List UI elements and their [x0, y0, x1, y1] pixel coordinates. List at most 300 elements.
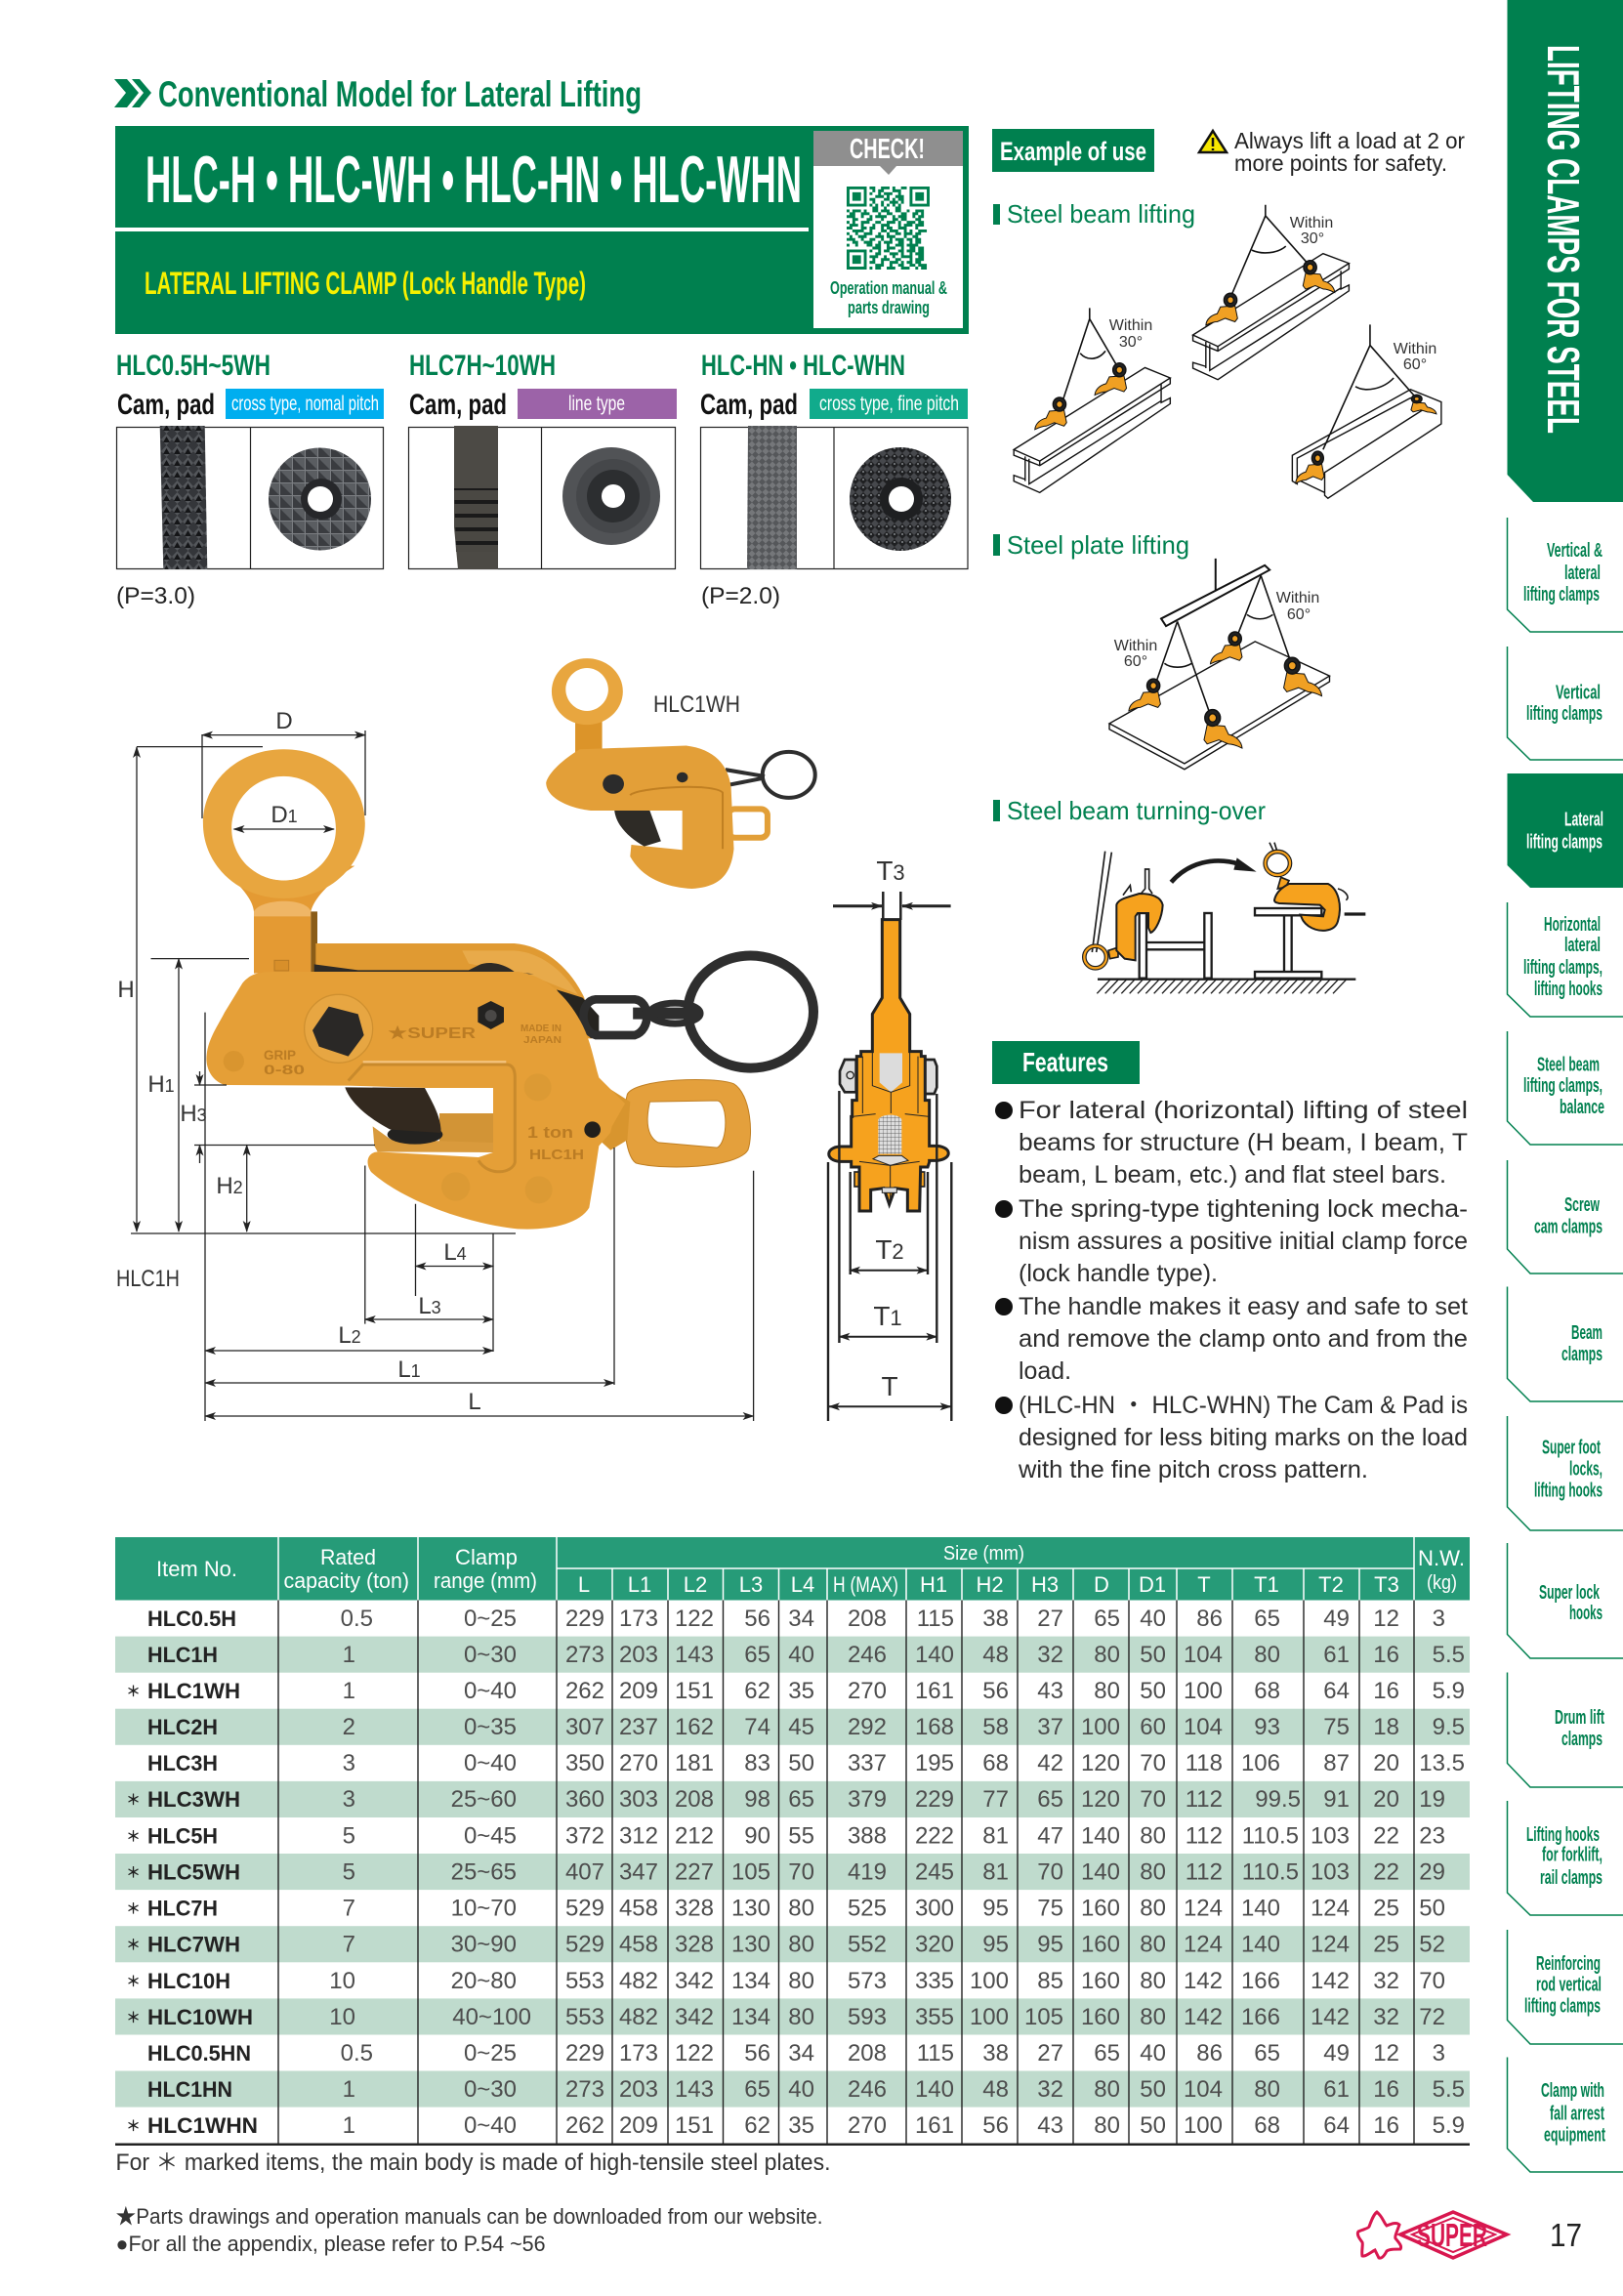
row: HLC3WH: 112: [1186, 1786, 1223, 1813]
row: HLC2H: 58: [982, 1714, 1009, 1740]
row: HLC1WH: 64: [1323, 1678, 1350, 1704]
table header: H2: [976, 1572, 1004, 1597]
row: HLC0.5H: 40: [1140, 1606, 1166, 1632]
row: HLC1WH: 62: [744, 1678, 770, 1704]
row: HLC1WHN: 16: [1373, 2112, 1399, 2139]
row: HLC7H: 25: [1373, 1895, 1399, 1922]
row: HLC1HN: 0~30: [464, 2076, 517, 2103]
row: HLC0.5H: 86: [1196, 1606, 1223, 1632]
row: HLC1H: 80: [1094, 1642, 1120, 1668]
table stripes: [115, 1637, 1470, 2108]
row: HLC1WHN: 5.9: [1433, 2112, 1465, 2139]
row: HLC5WH: 245: [915, 1859, 954, 1885]
row: HLC3WH: 25~60: [451, 1786, 517, 1813]
row: HLC1HN: 16: [1373, 2076, 1399, 2103]
row: HLC0.5H: 12: [1373, 1606, 1399, 1632]
QR code: [847, 187, 930, 270]
row: HLC5H: 140: [1081, 1822, 1120, 1850]
row: HLC1HN: 40: [788, 2076, 814, 2103]
row: HLC5WH: 80: [1140, 1859, 1166, 1885]
dimension labels: L3: [418, 1293, 441, 1319]
row: HLC10WH: ＊: [126, 2010, 141, 2026]
row: HLC10WH: 355: [915, 2004, 954, 2030]
row: HLC2H: 168: [915, 1714, 954, 1740]
within angle labels: beam lifting: 30°: [1301, 230, 1324, 247]
features list: [995, 1097, 1468, 1483]
row: HLC3WH: 70: [1140, 1786, 1166, 1813]
tab: vertical and lateral lifting clamps: [1508, 518, 1623, 632]
row: HLC7H: 130: [731, 1895, 770, 1922]
tab: clamp with fall arrest equipment: [1508, 2057, 1623, 2172]
row: HLC1HN: 5.5: [1433, 2076, 1465, 2103]
row: HLC1WHN: ＊: [126, 2118, 141, 2135]
row: HLC0.5HN: 56: [744, 2040, 770, 2066]
row: HLC7H: 7: [343, 1895, 355, 1922]
row: HLC7H: 529: [565, 1895, 604, 1922]
cam and pad variant: line type: line type: [568, 393, 625, 415]
tab: horizontal lateral lifting clamps, lifting hooks: [1508, 902, 1623, 1017]
table bottom rule: [115, 2143, 1470, 2146]
row: HLC1WH: 270: [848, 1678, 887, 1704]
row: HLC10H: 335: [915, 1968, 954, 1994]
row: HLC0.5HN: 65: [1254, 2040, 1280, 2066]
table header: H3: [1031, 1572, 1059, 1597]
row: HLC1WHN: 100: [1184, 2112, 1223, 2139]
table grid: [278, 1600, 1414, 2144]
table header: L: [578, 1572, 590, 1597]
row: HLC3H: 87: [1323, 1750, 1350, 1776]
row: HLC0.5H: 229: [565, 1606, 604, 1632]
row: HLC0.5HN: 3: [1433, 2040, 1445, 2066]
row: HLC2H: 104: [1184, 1714, 1223, 1740]
tab: lifting hooks for forklift, rail clamps: [1508, 1801, 1623, 1915]
row: HLC1HN: 50: [1140, 2076, 1166, 2103]
row: HLC1H: 0~30: [464, 1642, 517, 1668]
row: HLC3WH: 3: [343, 1786, 355, 1813]
row: HLC3WH: 20: [1373, 1786, 1399, 1813]
table header: Clamp: [455, 1545, 518, 1569]
row: HLC10H: [126, 1968, 1445, 1994]
row: HLC1H: 32: [1037, 1642, 1063, 1668]
row: HLC0.5H: 27: [1037, 1606, 1063, 1632]
tab: beam clamps: [1508, 1287, 1623, 1401]
row: HLC5H: 0~45: [464, 1822, 517, 1850]
row: HLC7H: 95: [982, 1895, 1009, 1922]
row: HLC10WH: 553: [565, 2004, 604, 2030]
row: HLC10WH: 482: [619, 2004, 658, 2030]
diagram: steel beam lifting: [1014, 205, 1441, 498]
row: HLC3WH: ＊: [126, 1792, 141, 1809]
row: HLC5WH: 419: [848, 1859, 887, 1885]
tab: screw cam clamps: Screw: [1564, 1194, 1600, 1216]
within angle labels: beam lifting: Within: [1290, 215, 1333, 231]
within angle labels: plate lifting: [1114, 590, 1319, 670]
safety warning: more points for safety.: [1234, 150, 1447, 176]
row: HLC1HN: 140: [915, 2076, 954, 2103]
embossed marks on clamp body: 0-80: [264, 1062, 305, 1077]
row: HLC3H: 106: [1241, 1750, 1280, 1776]
row: HLC2H: [147, 1714, 1465, 1740]
row: HLC5H: 222: [915, 1822, 954, 1850]
dimension labels: L4: [443, 1239, 467, 1266]
row: HLC1H: 48: [982, 1642, 1009, 1668]
row: HLC7WH: 95: [1037, 1932, 1063, 1958]
row: HLC1H: 246: [848, 1642, 887, 1668]
dimension labels: H: [117, 977, 135, 1003]
row: HLC0.5HN: 173: [619, 2040, 658, 2066]
row: HLC7H: 124: [1184, 1895, 1223, 1922]
row: HLC7H: 10~70: [451, 1895, 517, 1922]
row: HLC5H: HLC5H: [147, 1824, 218, 1848]
row: HLC5H: 110.5: [1242, 1822, 1299, 1850]
row: HLC10WH: 160: [1081, 2004, 1120, 2030]
row: HLC10H: ＊: [126, 1974, 141, 1990]
row: HLC7H: 300: [915, 1895, 954, 1922]
row: HLC5WH: 81: [982, 1859, 1009, 1885]
cam and pad variant: line type: HLC7H~10WH: [409, 350, 556, 382]
row: HLC5WH: [126, 1859, 1445, 1885]
table header: L3: [739, 1572, 763, 1597]
row: HLC1WHN: 0~40: [464, 2112, 517, 2139]
row: HLC2H: 100: [1081, 1714, 1120, 1740]
product title: HLC-H • HLC-WH • HLC-HN • HLC-WHN: [146, 143, 802, 217]
row: HLC3WH: 99.5: [1255, 1786, 1301, 1813]
row: HLC0.5HN: 34: [788, 2040, 814, 2066]
table header: capacity (ton): [283, 1568, 409, 1593]
row: HLC10H: 166: [1241, 1968, 1280, 1994]
row: HLC7WH: 52: [1419, 1932, 1445, 1958]
row: HLC3H: 3: [343, 1750, 355, 1776]
row: HLC10WH: HLC10WH: [147, 2005, 253, 2029]
photo: HLC1WH clamp: [546, 658, 815, 889]
row: HLC10WH: 10: [329, 2004, 355, 2030]
embossed marks on clamp body: 1 ton: [527, 1123, 573, 1142]
row: HLC1WH: HLC1WH: [147, 1679, 240, 1703]
row: HLC1HN: [147, 2076, 1465, 2103]
table header: H (MAX): [833, 1572, 898, 1597]
table header: L2: [684, 1572, 707, 1597]
table header: L4: [791, 1572, 814, 1597]
row: HLC0.5HN: 38: [982, 2040, 1009, 2066]
row: HLC3H: [147, 1750, 1465, 1776]
row: HLC5H: [126, 1822, 1445, 1850]
specification table: [115, 1537, 1470, 2146]
note: appendix: ●For all the appendix, please refer to P.54 ~56: [115, 2232, 545, 2256]
row: HLC5H: 47: [1037, 1822, 1063, 1850]
row: HLC5H: 55: [788, 1822, 814, 1850]
row: HLC10H: 142: [1184, 1968, 1223, 1994]
row: HLC7WH: 80: [1140, 1932, 1166, 1958]
row: HLC1HN: 65: [744, 2076, 770, 2103]
within angle labels: plate lifting: Within: [1276, 590, 1319, 606]
row: HLC0.5HN: [147, 2040, 1445, 2066]
row: HLC0.5H: 208: [848, 1606, 887, 1632]
row: HLC0.5H: 122: [675, 1606, 714, 1632]
table header: Item No.: [156, 1557, 237, 1581]
row: HLC10H: 20~80: [451, 1968, 517, 1994]
row: HLC1H: 65: [744, 1642, 770, 1668]
tab: reinforcing rod vertical lifting clamps: [1508, 1930, 1623, 2044]
row: HLC3H: 270: [619, 1750, 658, 1776]
table header: T2: [1318, 1572, 1344, 1597]
row: HLC1HN: 80: [1254, 2076, 1280, 2103]
row: HLC2H: 75: [1323, 1714, 1350, 1740]
features list: and remove the clamp onto and from the: [1019, 1325, 1468, 1353]
row: HLC7WH: 124: [1184, 1932, 1223, 1958]
row: HLC3H: 118: [1186, 1750, 1223, 1776]
subtitle: LATERAL LIFTING CLAMP (Lock Handle Type): [145, 266, 586, 301]
row: HLC1WH: 50: [1140, 1678, 1166, 1704]
example of use heading: [992, 129, 1154, 172]
row: HLC10WH: [126, 2004, 1445, 2030]
note: downloads: ★Parts drawings and operation manuals can be downloaded from our website.: [115, 2204, 822, 2229]
table header: N.W.: [1418, 1546, 1465, 1570]
row: HLC10H: 134: [731, 1968, 770, 1994]
clamp body: [206, 866, 646, 1230]
row: HLC5WH: 22: [1373, 1859, 1399, 1885]
row: HLC7H: 124: [1311, 1895, 1350, 1922]
row: HLC0.5HN: 12: [1373, 2040, 1399, 2066]
dimension labels: [117, 708, 905, 1415]
row: HLC1HN: 203: [619, 2076, 658, 2103]
row: HLC1H: 104: [1184, 1642, 1223, 1668]
row: HLC0.5HN: 229: [565, 2040, 604, 2066]
dimension labels: L1: [397, 1357, 421, 1383]
row: HLC5WH: 103: [1311, 1859, 1350, 1885]
suspension ring: [203, 749, 365, 898]
row: HLC7WH: ＊: [126, 1938, 141, 1954]
QR check panel: CHECK!: [850, 134, 925, 165]
row: HLC1WH: ＊: [126, 1684, 141, 1700]
row: HLC7H: 328: [675, 1895, 714, 1922]
row: HLC5H: 312: [619, 1822, 658, 1850]
row: HLC3WH: 360: [565, 1786, 604, 1813]
within angle labels: beam lifting: Within: [1109, 317, 1152, 334]
row: HLC3WH: 65: [1037, 1786, 1063, 1813]
row: HLC1WHN: 56: [982, 2112, 1009, 2139]
dimension labels: T1: [873, 1301, 902, 1331]
row: HLC3WH: 303: [619, 1786, 658, 1813]
row: HLC1WHN: 270: [848, 2112, 887, 2139]
row: HLC7WH: 160: [1081, 1932, 1120, 1958]
row: HLC7H: 458: [619, 1895, 658, 1922]
row: HLC2H: 292: [848, 1714, 887, 1740]
row: HLC10H: 100: [970, 1968, 1009, 1994]
example of use heading: Example of use: [1000, 137, 1146, 166]
sidebar tabs: [1508, 518, 1623, 2172]
row: HLC10H: 80: [788, 1968, 814, 1994]
row: HLC10WH: 142: [1184, 2004, 1223, 2030]
row: HLC0.5HN: 65: [1094, 2040, 1120, 2066]
tab: super foot locks, lifting hooks: [1508, 1416, 1623, 1530]
row: HLC1H: HLC1H: [147, 1643, 218, 1667]
within angle labels: beam lifting: Within: [1394, 341, 1436, 357]
row: HLC1HN: HLC1HN: [147, 2077, 232, 2102]
row: HLC5WH: 5: [343, 1859, 355, 1885]
row: HLC1WHN: 1: [343, 2112, 355, 2139]
row: HLC7WH: [126, 1932, 1445, 1958]
heading: steel beam turning-over: Steel beam turning-over: [1007, 796, 1266, 825]
features list: beam, L beam, etc.) and flat steel bars.: [1019, 1161, 1446, 1189]
row: HLC5WH: ＊: [126, 1865, 141, 1881]
row: HLC10H: 10: [329, 1968, 355, 1994]
row: HLC0.5HN: 0~25: [464, 2040, 517, 2066]
row: HLC1H: 80: [1254, 1642, 1280, 1668]
row: HLC5WH: 105: [731, 1859, 770, 1885]
row: HLC1HN: 48: [982, 2076, 1009, 2103]
row: HLC3H: 337: [848, 1750, 887, 1776]
row: HLC5H: 23: [1419, 1822, 1445, 1850]
features list: with the fine pitch cross pattern.: [1018, 1456, 1368, 1483]
title: conventional model: Conventional Model for Lateral Lifting: [158, 74, 642, 114]
embossed marks on clamp body: GRIP: [264, 1047, 296, 1063]
features list: (HLC-HN ・ HLC-WHN) The Cam & Pad is: [1019, 1392, 1468, 1419]
row: HLC3WH: 229: [915, 1786, 954, 1813]
row: HLC7WH: 458: [619, 1932, 658, 1958]
table header: T1: [1254, 1572, 1279, 1597]
row: HLC5H: 112: [1186, 1822, 1223, 1850]
cam and pad variant: cross type normal pitch: Cam, pad: [117, 389, 215, 421]
safety warning: Always lift a load at 2 or: [1234, 128, 1465, 153]
cam and pad variant: cross type normal pitch: [116, 350, 384, 609]
row: HLC5H: 372: [565, 1822, 604, 1850]
row: HLC3WH: 208: [675, 1786, 714, 1813]
QR check panel: Operation manual &: [830, 278, 947, 298]
row: HLC3H: 195: [915, 1750, 954, 1776]
table header: range (mm): [434, 1568, 537, 1593]
row: HLC1WH: 56: [982, 1678, 1009, 1704]
row: HLC7WH: 328: [675, 1932, 714, 1958]
row: HLC10WH: 32: [1373, 2004, 1399, 2030]
row: HLC3H: 350: [565, 1750, 604, 1776]
row: HLC10H: 482: [619, 1968, 658, 1994]
features list: nism assures a positive initial clamp force: [1019, 1228, 1468, 1255]
title: conventional model: [114, 74, 642, 114]
row: HLC0.5HN: HLC0.5HN: [147, 2041, 251, 2066]
dimension labels: H2: [216, 1173, 243, 1199]
row: HLC0.5H: [147, 1606, 1445, 1632]
tab: steel beam lifting clamps, balance: [1508, 1031, 1623, 1145]
row: HLC0.5H: 56: [744, 1606, 770, 1632]
row: HLC1WHN: [126, 2112, 1465, 2139]
row: HLC3H: 13.5: [1419, 1750, 1465, 1776]
tab: vertical and lateral lifting clamps: lateral: [1564, 563, 1601, 584]
row: HLC7H: 160: [1081, 1895, 1120, 1922]
logo: SUPER: [1357, 2212, 1507, 2258]
embossed marks on clamp body: HLC1H: [529, 1147, 584, 1163]
row: HLC2H: 37: [1037, 1714, 1063, 1740]
row: HLC5H: 212: [675, 1822, 714, 1850]
row: HLC3WH: 120: [1081, 1786, 1120, 1813]
row: HLC1HN: 1: [343, 2076, 355, 2103]
dimension labels: D1: [270, 802, 298, 828]
row: HLC10WH: 100: [970, 2004, 1009, 2030]
logo: SUPER: SUPER: [1417, 2217, 1487, 2253]
row: HLC5H: 90: [744, 1822, 770, 1850]
table header: Size (mm): [943, 1543, 1024, 1565]
row: HLC1WHN: 209: [619, 2112, 658, 2139]
dimension lines: [131, 731, 951, 1421]
row: HLC3H: 50: [788, 1750, 814, 1776]
row: HLC5H: 5: [343, 1822, 355, 1850]
safety warning: [1199, 128, 1465, 176]
cam and pad variant: cross type fine pitch: [700, 350, 968, 609]
row: HLC3WH: 19: [1419, 1786, 1445, 1813]
row: HLC10H: 32: [1373, 1968, 1399, 1994]
row: HLC1WH: 100: [1184, 1678, 1223, 1704]
row: HLC7H: 525: [848, 1895, 887, 1922]
row: HLC2H: HLC2H: [147, 1715, 218, 1739]
dimension labels: L2: [338, 1322, 361, 1349]
row: HLC5H: 81: [982, 1822, 1009, 1850]
row: HLC10H: 85: [1037, 1968, 1063, 1994]
row: HLC10WH: 593: [848, 2004, 887, 2030]
row: HLC0.5H: 0~25: [464, 1606, 517, 1632]
row: HLC7H: 140: [1241, 1895, 1280, 1922]
row: HLC1HN: 80: [1094, 2076, 1120, 2103]
features list: load.: [1019, 1357, 1071, 1385]
photo: HLC1H clamp: [203, 749, 813, 1230]
row: HLC5WH: 407: [565, 1859, 604, 1885]
row: HLC1H: 273: [565, 1642, 604, 1668]
row: HLC7WH: 30~90: [451, 1932, 517, 1958]
row: HLC1HN: 273: [565, 2076, 604, 2103]
row: HLC1WH: 0~40: [464, 1678, 517, 1704]
row: HLC1WHN: 68: [1254, 2112, 1280, 2139]
row: HLC1WHN: 262: [565, 2112, 604, 2139]
row: HLC10WH: 105: [1024, 2004, 1063, 2030]
row: HLC1WH: 43: [1037, 1678, 1063, 1704]
row: HLC1H: 50: [1140, 1642, 1166, 1668]
row: HLC10H: 142: [1311, 1968, 1350, 1994]
row: HLC1WHN: 43: [1037, 2112, 1063, 2139]
tab: vertical lifting clamps: [1508, 647, 1623, 760]
row: HLC7H: 50: [1419, 1895, 1445, 1922]
label: HLC1WH: HLC1WH: [653, 691, 740, 718]
row: HLC0.5H: 38: [982, 1606, 1009, 1632]
row: HLC3H: 42: [1037, 1750, 1063, 1776]
features list: The spring-type tightening lock mecha-: [1019, 1195, 1468, 1223]
row: HLC2H: 162: [675, 1714, 714, 1740]
row: HLC1WH: 209: [619, 1678, 658, 1704]
row: HLC0.5H: 3: [1433, 1606, 1445, 1632]
cam and pad variant: cross type fine pitch: HLC-HN • HLC-WHN: [701, 350, 905, 382]
row: HLC0.5HN: 208: [848, 2040, 887, 2066]
embossed marks on clamp body: JAPAN: [523, 1035, 562, 1046]
row: HLC1H: 143: [675, 1642, 714, 1668]
row: HLC1HN: 104: [1184, 2076, 1223, 2103]
row: HLC5WH: 29: [1419, 1859, 1445, 1885]
row: HLC1WHN: 80: [1094, 2112, 1120, 2139]
row: HLC3WH: HLC3WH: [147, 1787, 240, 1812]
row: HLC0.5HN: 40: [1140, 2040, 1166, 2066]
row: HLC3H: 70: [1140, 1750, 1166, 1776]
table header: L1: [628, 1572, 651, 1597]
embossed marks on clamp body: MADE IN: [520, 1023, 562, 1034]
table header: T3: [1374, 1572, 1399, 1597]
row: HLC3H: 120: [1081, 1750, 1120, 1776]
row: HLC1WH: 16: [1373, 1678, 1399, 1704]
row: HLC1WHN: 62: [744, 2112, 770, 2139]
row: HLC1WH: 80: [1094, 1678, 1120, 1704]
row: HLC10H: 160: [1081, 1968, 1120, 1994]
tab: lateral lifting clamps (active): [1508, 773, 1623, 888]
row: HLC1WHN: 50: [1140, 2112, 1166, 2139]
row: HLC5WH: HLC5WH: [147, 1859, 240, 1885]
row: HLC1H: 203: [619, 1642, 658, 1668]
row: HLC1WHN: 64: [1323, 2112, 1350, 2139]
row: HLC1H: 140: [915, 1642, 954, 1668]
